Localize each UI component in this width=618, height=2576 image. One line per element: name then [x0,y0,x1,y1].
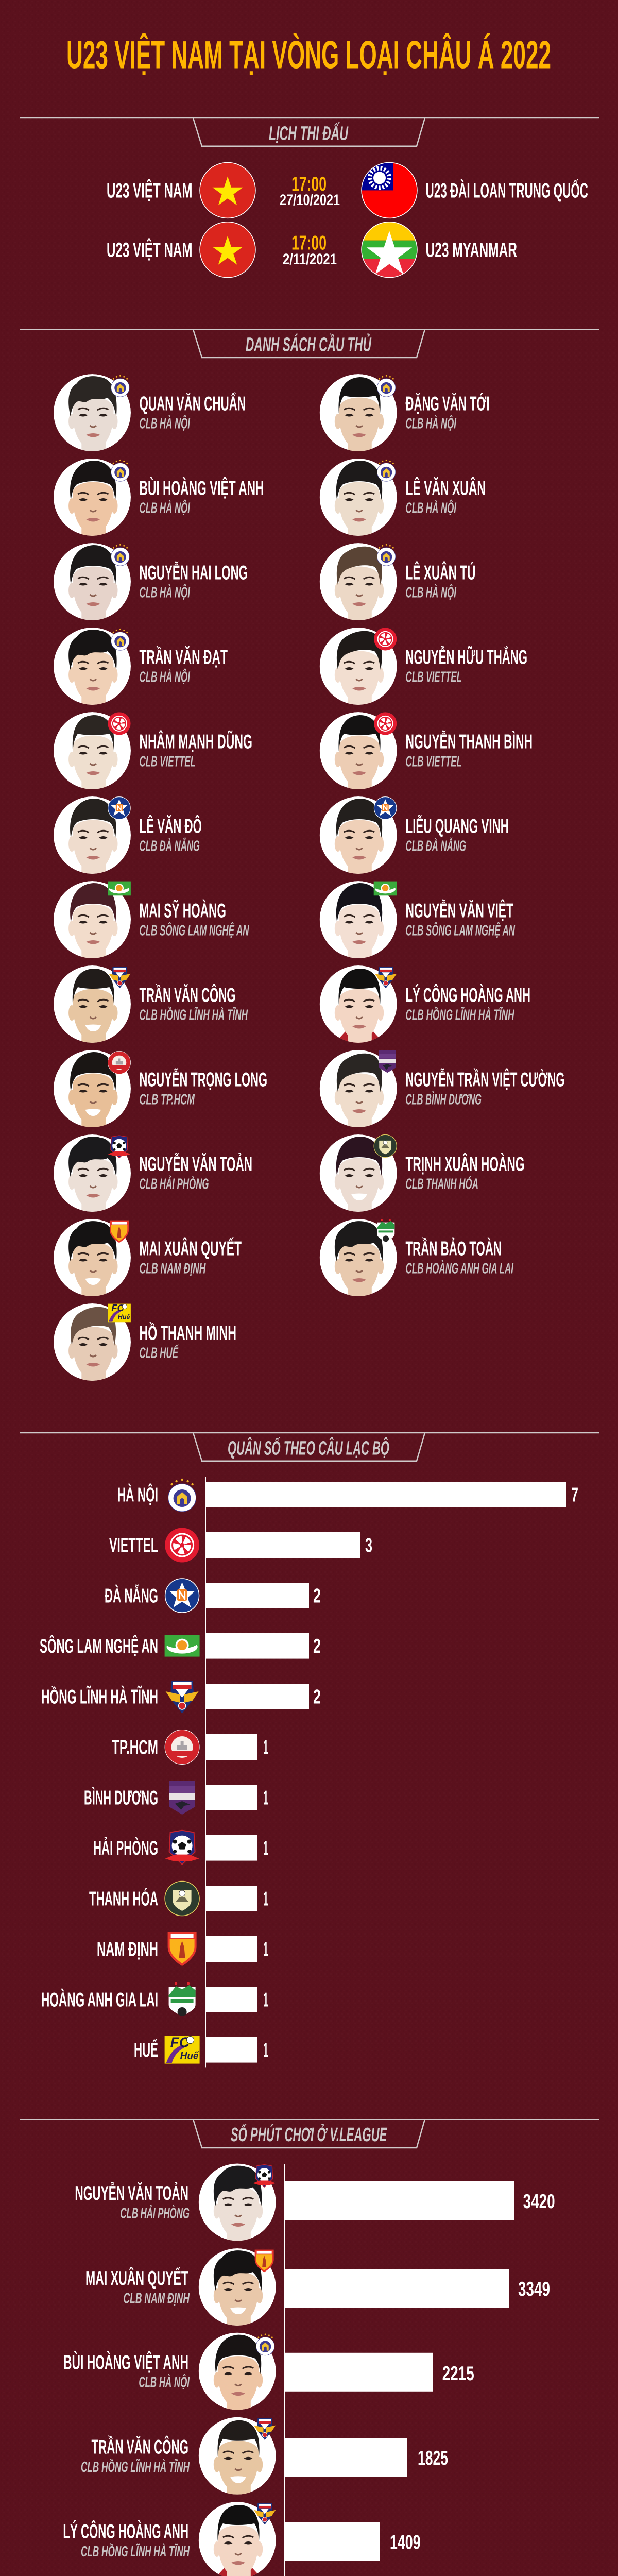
row: Bùi Hoàng Việt Anh 2215 [63,2333,474,2410]
row: Lý Công Hoàng Anh 1409: 1409 [390,2532,421,2554]
panel: V.League minutes chart [20,2119,599,2576]
row: Thanh Hóa: THANH HÓA [89,1888,158,1910]
player: Nhâm Mạnh Dũng: NHÂM MẠNH DŨNG [139,731,252,753]
player: Hồ Thanh Minh: HỒ THANH MINH [139,1322,236,1345]
row: Đà Nẵng: 2 [313,1585,321,1607]
row: Bùi Hoàng Việt Anh 2215: CLB HÀ NỘI [139,2374,190,2391]
player: Nguyễn Hữu Thắng: CLB VIETTEL [406,669,462,686]
heading: schedule: LỊCH THI ĐẤU [269,122,349,144]
player: Trần Văn Đạt [54,628,228,705]
heading: squad [20,329,599,358]
row: Bình Dương: BÌNH DƯƠNG [84,1787,158,1809]
panel: match schedule [20,118,599,278]
player: Nguyễn Văn Việt [320,881,516,958]
player: Nguyễn Trọng Long: NGUYỄN TRỌNG LONG [139,1069,267,1091]
player: Lê Văn Xuân: CLB HÀ NỘI [406,499,457,517]
row: Hà Nội: 7 [571,1484,578,1506]
row: Trần Văn Công 1825: 1825 [418,2447,448,2469]
heading: minutes [20,2119,599,2148]
row: Trần Văn Công 1825 [81,2417,448,2495]
match 1: 17:00 [291,173,327,195]
player: Nhâm Mạnh Dũng [54,712,252,789]
row: Nguyễn Văn Toản 3420: 3420 [523,2191,555,2213]
panel: players per club bar chart: 1 [263,1989,268,2011]
row: Lý Công Hoàng Anh 1409: LÝ CÔNG HOÀNG ANH [63,2520,188,2543]
heading: minutes: SỐ PHÚT CHƠI Ở V.LEAGUE [231,2123,387,2146]
player: Quan Văn Chuẩn [54,374,246,451]
row: Thanh Hóa [89,1882,268,1916]
player: Liễu Quang Vinh [320,796,509,874]
row: Hồng Lĩnh Hà Tĩnh: 2 [313,1686,321,1708]
row: Huế [134,2035,268,2064]
row: Nguyễn Văn Toản 3420: CLB HẢI PHÒNG [120,2204,190,2222]
row: Đà Nẵng: ĐÀ NẴNG [105,1585,158,1607]
row: Hà Nội: HÀ NỘI [117,1483,158,1506]
match 1: 27/10/2021 [280,192,340,209]
row: Sông Lam Nghệ An: 2 [313,1635,321,1657]
player: Nguyễn Trần Việt Cường: CLB BÌNH DƯƠNG [406,1091,482,1108]
player: Nguyễn Văn Toản [54,1134,252,1212]
row: Hải Phòng: HẢI PHÒNG [93,1837,158,1859]
row: Trần Văn Công 1825: CLB HỒNG LĨNH HÀ TĨNH [81,2458,190,2476]
player: Nhâm Mạnh Dũng: CLB VIETTEL [139,754,196,770]
match 2: U23 MYANMAR [425,239,517,262]
player: Nguyễn Hai Long: CLB HÀ NỘI [139,584,191,601]
player: Liễu Quang Vinh: CLB ĐÀ NẴNG [406,837,466,855]
match 2 [107,222,517,278]
panel: squad list [20,329,599,1381]
player: Lê Văn Xuân [320,459,486,536]
row: Hải Phòng [93,1831,268,1865]
chart axis [284,2164,285,2576]
player: Nguyễn Hai Long [54,543,248,620]
row: Huế: HUẾ [134,2039,158,2061]
player: Lê Xuân Tú: CLB HÀ NỘI [406,584,457,601]
row: Đà Nẵng [105,1579,321,1613]
panel: players per club bar chart: 1 [263,1787,268,1809]
row: Mai Xuân Quyết 3349 [85,2248,550,2326]
panel: players per club bar chart: 1 [263,1888,268,1910]
heading: players per club [20,1433,599,1461]
player: Lê Văn Xuân: LÊ VĂN XUÂN [406,477,486,500]
row: Viettel: 3 [365,1534,372,1557]
player: Nguyễn Hai Long: NGUYỄN HAI LONG [139,562,248,584]
player: Đặng Văn Tới [320,374,489,451]
row: Lý Công Hoàng Anh 1409: CLB HỒNG LĨNH HÀ TĨNH [81,2543,190,2560]
player: Nguyễn Trọng Long: CLB TP.HCM [139,1092,195,1108]
row: Nguyễn Văn Toản 3420: NGUYỄN VĂN TOẢN [75,2182,188,2205]
player: Mai Sỹ Hoàng [54,881,249,958]
player: Lý Công Hoàng Anh: CLB HỒNG LĨNH HÀ TĨNH [406,1006,514,1024]
panel: players per club bar chart: 1 [263,1736,268,1759]
row: Hoàng Anh Gia Lai: HOÀNG ANH GIA LAI [41,1989,158,2011]
match 1 [107,162,588,218]
match 1: U23 VIỆT NAM [107,179,193,202]
player: Liễu Quang Vinh: LIỄU QUANG VINH [406,815,509,838]
row: Bùi Hoàng Việt Anh 2215: BÙI HOÀNG VIỆT ANH [63,2351,188,2374]
player: Lê Văn Đô: LÊ VĂN ĐÔ [139,815,202,838]
row: Lý Công Hoàng Anh 1409 [63,2502,421,2576]
player: Trần Văn Đạt: CLB HÀ NỘI [139,668,191,686]
player: Quan Văn Chuẩn: QUAN VĂN CHUẨN [139,392,246,415]
row: Sông Lam Nghệ An [40,1633,321,1659]
row: Bình Dương [84,1781,268,1815]
row: Mai Xuân Quyết 3349: 3349 [518,2278,550,2300]
row: Bùi Hoàng Việt Anh 2215: 2215 [442,2363,474,2385]
player: Trịnh Xuân Hoàng: TRỊNH XUÂN HOÀNG [406,1153,524,1176]
row: Mai Xuân Quyết 3349: CLB NAM ĐỊNH [124,2290,190,2307]
player: Bùi Hoàng Việt Anh [54,459,264,536]
row: Viettel: VIETTEL [109,1534,158,1557]
player: Lê Xuân Tú: LÊ XUÂN TÚ [406,562,476,584]
player: Nguyễn Hữu Thắng [320,628,527,705]
match 2: U23 VIỆT NAM [107,238,193,262]
player: Mai Xuân Quyết: CLB NAM ĐỊNH [139,1261,206,1277]
player: Trịnh Xuân Hoàng: CLB THANH HÓA [406,1175,478,1193]
row: TP.HCM: TP.HCM [112,1736,158,1759]
player: Lê Văn Đô [54,796,202,874]
player: Đặng Văn Tới: ĐẶNG VĂN TỚI [406,393,489,415]
heading: squad: DANH SÁCH CẦU THỦ [246,333,372,356]
player: Hồ Thanh Minh: CLB HUẾ [139,1344,179,1362]
player: Nguyễn Trần Việt Cường [320,1050,564,1127]
player: Nguyễn Thanh Bình: NGUYỄN THANH BÌNH [406,731,533,753]
panel: players per club bar chart: 1 [263,1938,268,1961]
player: Bùi Hoàng Việt Anh: BÙI HOÀNG VIỆT ANH [139,477,264,500]
row: Viettel [109,1528,372,1562]
player: Đặng Văn Tới: CLB HÀ NỘI [406,415,457,432]
row: Hà Nội [117,1479,578,1512]
match 2: 2/11/2021 [283,251,337,268]
player: Nguyễn Hữu Thắng: NGUYỄN HỮU THẮNG [406,646,527,669]
heading: schedule [20,118,599,146]
player: Mai Xuân Quyết [54,1219,242,1296]
row: Trần Văn Công 1825: TRẦN VĂN CÔNG [92,2435,188,2459]
heading: players per club: QUÂN SỐ THEO CÂU LẠC BỘ [228,1436,389,1459]
player: Nguyễn Văn Việt: NGUYỄN VĂN VIỆT [406,900,513,922]
player: Trần Bảo Toàn [320,1219,514,1296]
player: Lý Công Hoàng Anh [320,965,530,1043]
panel: players per club bar chart: 1 [263,2039,268,2061]
row: Nam Định: NAM ĐỊNH [97,1938,158,1961]
player: Trịnh Xuân Hoàng [320,1134,524,1212]
player: Nguyễn Văn Việt: CLB SÔNG LAM NGHỆ AN [406,922,516,939]
panel: players per club bar chart [20,1433,599,2067]
player: Trần Bảo Toàn: TRẦN BẢO TOÀN [406,1238,502,1260]
player: Nguyễn Trọng Long [54,1050,267,1127]
row: Sông Lam Nghệ An: SÔNG LAM NGHỆ AN [40,1634,158,1657]
player: Mai Sỹ Hoàng: CLB SÔNG LAM NGHỆ AN [139,922,249,939]
player: Hồ Thanh Minh [54,1302,236,1381]
player: Nguyễn Văn Toản: CLB HẢI PHÒNG [139,1175,209,1193]
match 2: 17:00 [291,232,327,255]
player: Nguyễn Thanh Bình: CLB VIETTEL [406,754,462,770]
player: Nguyễn Thanh Bình [320,712,533,789]
player: Mai Sỹ Hoàng: MAI SỸ HOÀNG [139,900,226,922]
row: Hồng Lĩnh Hà Tĩnh [41,1681,321,1714]
player: Quan Văn Chuẩn: CLB HÀ NỘI [139,415,191,432]
row: Nguyễn Văn Toản 3420 [75,2164,555,2241]
player: Lê Xuân Tú [320,543,476,620]
player: Trần Văn Công: CLB HỒNG LĨNH HÀ TĨNH [139,1006,248,1024]
row: Hồng Lĩnh Hà Tĩnh: HỒNG LĨNH HÀ TĨNH [41,1686,158,1708]
player: Nguyễn Văn Toản: NGUYỄN VĂN TOẢN [139,1153,252,1176]
player: Trần Bảo Toàn: CLB HOÀNG ANH GIA LAI [406,1260,514,1277]
player: Trần Văn Đạt: TRẦN VĂN ĐẠT [139,646,228,669]
row: Mai Xuân Quyết 3349: MAI XUÂN QUYẾT [85,2267,188,2290]
panel: players per club bar chart: 1 [263,1837,268,1859]
chart axis [205,1477,206,2067]
row: Nam Định [97,1932,268,1966]
row: TP.HCM [112,1730,268,1764]
row: Hoàng Anh Gia Lai [41,1982,268,2016]
player: Mai Xuân Quyết: MAI XUÂN QUYẾT [139,1238,242,1260]
player: Bùi Hoàng Việt Anh: CLB HÀ NỘI [139,499,191,517]
player: Trần Văn Công [54,965,248,1043]
player: Trần Văn Công: TRẦN VĂN CÔNG [139,984,236,1007]
player: Lê Văn Đô: CLB ĐÀ NẴNG [139,837,200,855]
